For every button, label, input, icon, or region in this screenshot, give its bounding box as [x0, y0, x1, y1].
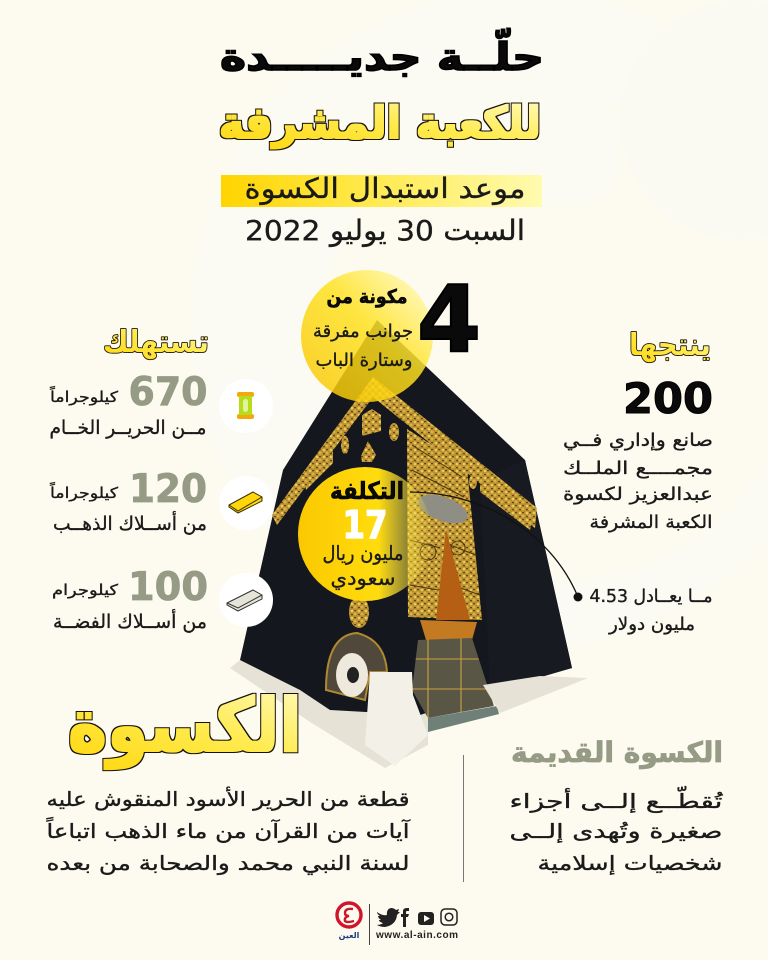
- old kiswa text: [510, 786, 723, 876]
- gold unit: كيلوجراماً: [49, 482, 119, 502]
- step: [428, 706, 499, 732]
- date: السبت 30 يوليو 2022: [245, 214, 525, 247]
- silver text: من أســلاك الفضــة: [53, 609, 207, 633]
- marble base: [230, 660, 428, 768]
- heading: kiswa: الكسوة: [68, 683, 302, 770]
- heading: old kiswa: الكسوة القديمة: [511, 736, 723, 769]
- curtain frames: [410, 445, 480, 595]
- footer divider: [369, 904, 370, 945]
- USD equivalent: [590, 586, 712, 635]
- circle: cost: [298, 467, 432, 601]
- icon: instagram: [441, 909, 457, 925]
- band heading: موعد استبدال الكسوة: [244, 172, 526, 205]
- right face shade: [480, 460, 572, 690]
- silk text: مــن الحريــر الخــام: [50, 417, 206, 439]
- kiswa description: آيات من القرآن من ماء الذهب اتباعاً: [46, 817, 411, 843]
- gold text: من أســلاك الذهــب: [53, 511, 207, 535]
- panel: consumes heading: تستهلك: [103, 325, 209, 360]
- circle text line 1: جوانب مفرقة: [313, 321, 413, 342]
- icon: facebook: [401, 908, 409, 927]
- kiswa description: [46, 787, 411, 876]
- cost unit: مليون ريال: [322, 541, 404, 565]
- marble corner: [365, 672, 428, 766]
- Kaaba illustration: [230, 320, 588, 768]
- producers text: الكعبة المشرفة: [590, 512, 712, 533]
- silver unit: كيلوجرام: [52, 581, 119, 599]
- circle text line 2: وستارة الباب: [316, 350, 412, 371]
- icon: twitter: [377, 908, 400, 927]
- icon: gold bar: [219, 476, 273, 530]
- social icons: [377, 908, 457, 927]
- circle: four sides: [301, 266, 481, 402]
- medallions: [341, 409, 477, 628]
- producers text: عبدالعزيز لكسوة: [563, 484, 713, 505]
- cost number: 17: [342, 503, 388, 547]
- USD equivalent: مليون دولار: [608, 614, 695, 635]
- gold belt: [272, 377, 537, 528]
- icon: spool: [219, 379, 273, 433]
- door: [436, 530, 470, 620]
- title line 1: حلّــة جديـــــدة: [220, 28, 544, 79]
- black stone frame: [326, 633, 387, 700]
- footer logo: [337, 903, 361, 940]
- date band: [221, 175, 542, 207]
- lower belt pieces: [279, 451, 532, 530]
- panel: producers heading: ينتجها: [629, 328, 711, 363]
- stone wall: [412, 638, 494, 718]
- silk amount: 670: [128, 370, 208, 415]
- kiswa description: قطعة من الحرير الأسود المنقوش عليه: [46, 787, 410, 811]
- old kiswa text: شخصيات إسلامية: [538, 851, 722, 876]
- cost unit 2: سعودي: [330, 566, 396, 591]
- producers text: مجمــــع الملــك: [563, 458, 713, 479]
- footer logo: العين: [339, 931, 360, 940]
- silver amount: 100: [128, 565, 208, 610]
- divider: [463, 755, 464, 882]
- right step marble: [483, 676, 588, 713]
- producers number: 200: [623, 374, 713, 423]
- silk unit: كيلوجراماً: [49, 386, 119, 406]
- item: silk: [49, 370, 273, 439]
- producers text: صانع وإداري فــي: [563, 430, 713, 451]
- black silhouette: [240, 320, 572, 715]
- icon: silver bar: [219, 573, 273, 627]
- door lower panel: [420, 620, 477, 640]
- producers text: [563, 430, 713, 533]
- old kiswa text: تُقطّــع إلــى أجزاء: [510, 786, 723, 814]
- door curtain: [407, 429, 482, 620]
- cost heading: التكلفة: [330, 477, 404, 505]
- item: silver: [52, 565, 273, 633]
- website: www.al-ain.com: [375, 930, 458, 941]
- gold amount: 120: [129, 467, 207, 512]
- icon: youtube: [418, 912, 434, 925]
- item: gold: [49, 467, 273, 535]
- old kiswa text: صغيرة وتُهدى إلــى: [510, 819, 722, 844]
- circle heading: مكونة من: [326, 286, 408, 308]
- kiswa description: لسنة النبي محمد والصحابة من بعده: [46, 851, 410, 876]
- connector arrow: [410, 492, 582, 602]
- silver plaque: [414, 489, 472, 529]
- USD equivalent: مــا يعــادل 4.53: [590, 586, 712, 607]
- four numeral: 4: [417, 266, 481, 373]
- title line 2: للكعبة المشرفة: [219, 98, 541, 149]
